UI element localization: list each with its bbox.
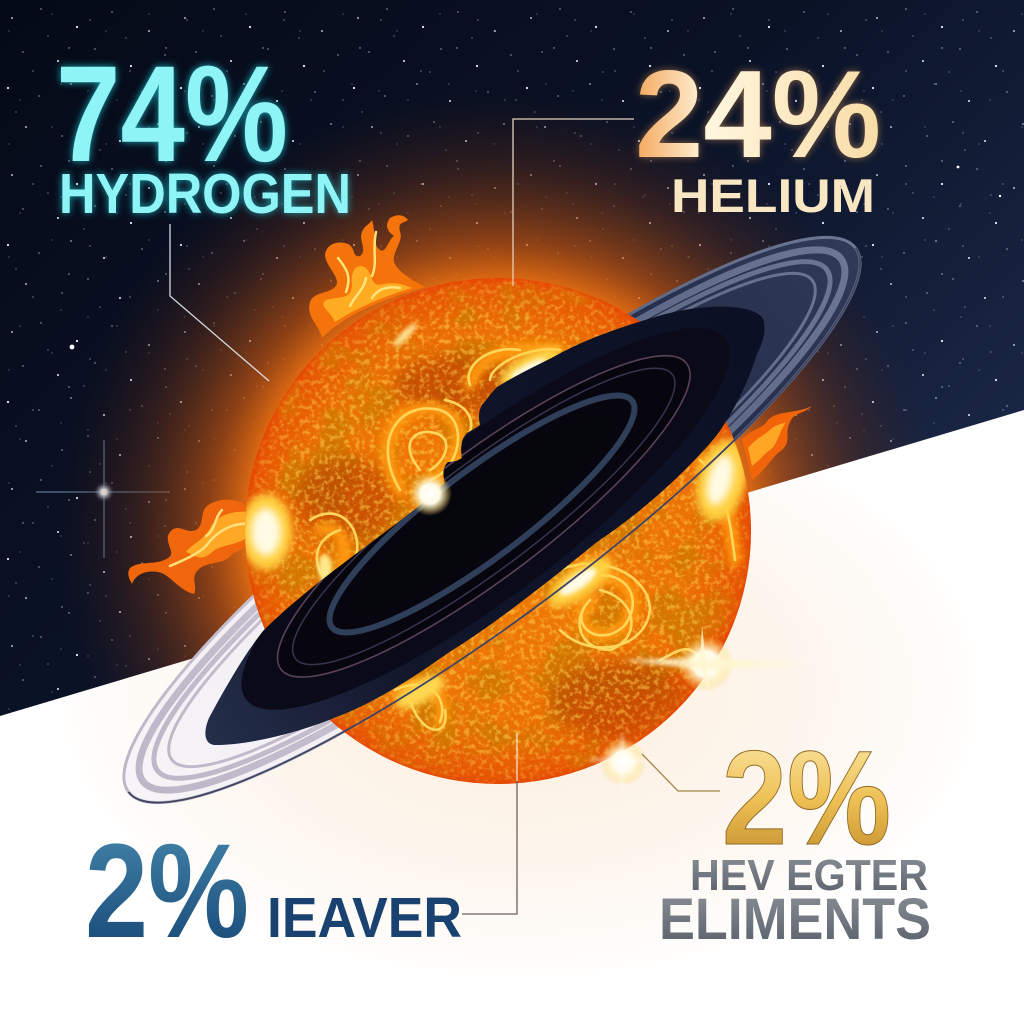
label: 74% hydrogen: 74% — [56, 38, 288, 191]
label: 24% helium: 24% — [635, 46, 881, 184]
surface texture: dark patches and grain — [245, 278, 751, 784]
label: 2% heaver: 2% — [85, 817, 249, 966]
sun halo over space — [68, 100, 906, 682]
leader: heavier — [462, 781, 517, 914]
flare loops: orange glow layer — [320, 348, 735, 722]
leader: heavier elements — [642, 754, 720, 791]
ring front edge: thin line crossing the sun — [128, 248, 913, 869]
label: 74% hydrogen: HYDROGEN — [59, 162, 351, 226]
star: large sparkle left — [36, 166, 1001, 558]
flames: top, left, right — [128, 215, 812, 594]
label: 2% heaver — [85, 817, 462, 966]
leader lines — [170, 119, 720, 914]
leader: hydrogen — [170, 224, 269, 381]
sparkles — [590, 625, 810, 790]
label: 2% heaver: IEAVER — [267, 886, 462, 950]
flare at disc edge — [408, 472, 452, 516]
label: 24% helium: HELIUM — [671, 169, 875, 222]
label: 2% heavier elements: 2% — [722, 724, 891, 873]
bright hot spots — [240, 321, 756, 716]
label: 24% helium: 24% — [635, 46, 881, 184]
label: 74% hydrogen: 74% — [56, 38, 288, 191]
leader: heavier (on sun) — [516, 733, 518, 781]
label: 2% heavier elements: ELIMENTS — [659, 887, 931, 952]
leader: helium — [513, 119, 634, 286]
label: 74% hydrogen: HYDROGEN — [59, 162, 351, 226]
background: warm glow on white area — [40, 390, 1000, 990]
label: 2% heavier elements: HEV EGTER — [690, 851, 928, 900]
ring system: dark disc in front of the sun — [205, 306, 765, 745]
label: 2% heavier elements — [659, 724, 931, 952]
sun sphere — [240, 278, 756, 784]
background: starry space panel — [0, 0, 1024, 716]
flare loops: yellow filaments — [310, 349, 735, 730]
rear ring: striped annulus behind the sun — [71, 171, 913, 869]
